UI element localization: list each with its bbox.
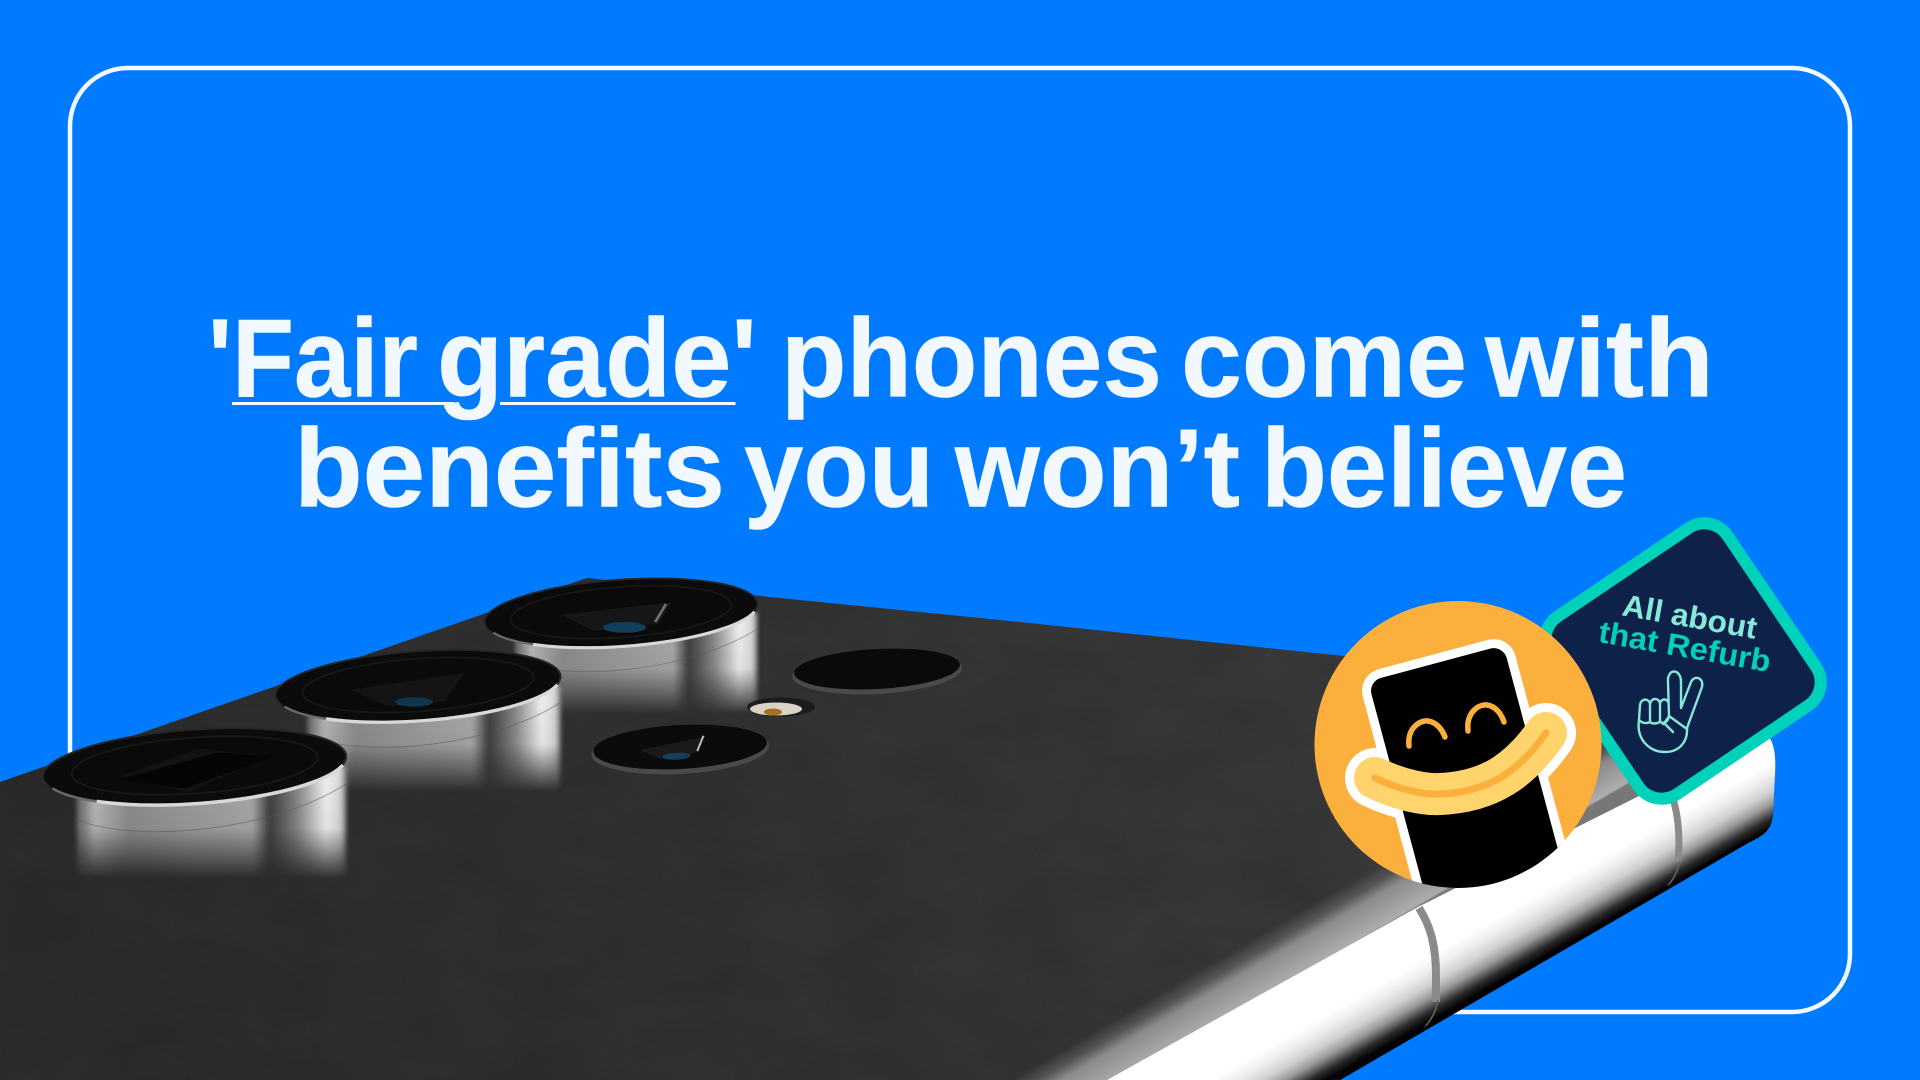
title: won’t [954, 406, 1240, 530]
title: grade' [437, 296, 757, 420]
icon: victory hand [1639, 672, 1702, 752]
metal side rail [1107, 738, 1776, 1080]
title: believe [1261, 406, 1627, 530]
mascot circle [1314, 601, 1602, 888]
camera top [482, 570, 761, 719]
phone back face [0, 578, 1776, 1080]
title: phones [781, 296, 1162, 420]
bottom edge [1340, 843, 1748, 1080]
title [208, 296, 1714, 530]
right eye [1468, 705, 1504, 731]
camera left [40, 719, 351, 884]
badge: All about that Refurb [1534, 512, 1832, 810]
left eye [1409, 721, 1445, 746]
badge tile [1534, 512, 1832, 810]
camera middle [273, 641, 565, 797]
rail seam left [1419, 908, 1438, 1028]
badge text line 2: that Refurb [1596, 614, 1774, 679]
phone character [1362, 639, 1565, 888]
rail seam right [1664, 796, 1680, 890]
smile band [1375, 733, 1546, 794]
title: 'Fair [208, 296, 418, 420]
smile white outline [1375, 733, 1546, 794]
smile centre line [1375, 733, 1546, 794]
title: come [1181, 296, 1467, 420]
flash [747, 698, 815, 716]
badge text line 1: All about [1620, 588, 1760, 646]
phone [0, 578, 1776, 1080]
small lens [590, 720, 770, 779]
depth sensor oval [791, 645, 963, 698]
bevel highlight [1018, 738, 1775, 1080]
title: with [1484, 296, 1714, 420]
title: you [744, 406, 934, 530]
title: benefits [294, 406, 725, 530]
